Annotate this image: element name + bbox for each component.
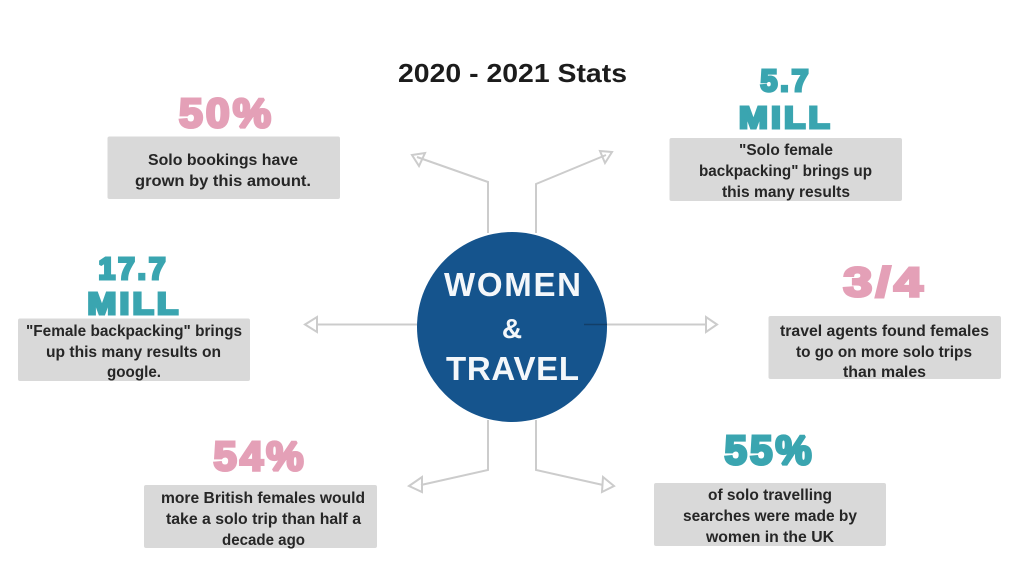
stat: 5.7 mill: 5.7 [760, 63, 812, 98]
central circle [417, 232, 607, 422]
arrow: to travel agents [606, 317, 717, 332]
stat: 50% solo bookings: grown by this amount. [135, 173, 311, 190]
stat: 17.7 mill [18, 251, 250, 381]
stat: 50% solo bookings: 50% [179, 90, 274, 136]
stat: 17.7 mill: google. [107, 364, 161, 381]
arrow: to UK searches [536, 420, 614, 492]
stat: 54% British females: 54% [214, 433, 306, 479]
stat: 55% UK searches: searches were made by [683, 508, 857, 525]
stat: 3/4 travel agents [768, 259, 1001, 381]
stat: 3/4 travel agents: travel agents found females [780, 323, 989, 340]
stat: 3/4 travel agents: than males [843, 364, 926, 381]
stat: 17.7 mill: MILL [88, 286, 182, 321]
stat: 54% British females: take a solo trip than half a [166, 511, 361, 528]
stat: 55% UK searches: of solo travelling [708, 487, 832, 504]
stat: 54% British females: more British females would [161, 490, 365, 507]
arrow: to female backpacking [305, 317, 418, 332]
stat: 50% solo bookings: Solo bookings have [148, 152, 298, 169]
stat: 50% solo bookings [108, 90, 340, 199]
stat: 5.7 mill: MILL [739, 100, 833, 135]
stat: 3/4 travel agents: 3/4 [844, 259, 926, 305]
circle label: WOMEN [444, 266, 581, 303]
circle label: TRAVEL [446, 350, 579, 387]
stat: 55% UK searches: 55% [724, 427, 814, 473]
stat: 3/4 travel agents: to go on more solo trips [796, 344, 972, 361]
title: 2020 - 2021 Stats [398, 58, 627, 88]
arrow: to solo bookings [412, 153, 488, 233]
stat: 5.7 mill: backpacking" brings up [699, 163, 872, 180]
stat: 17.7 mill: up this many results on [46, 344, 221, 361]
stat: 17.7 mill: 17.7 [98, 251, 168, 286]
stat: 5.7 mill: "Solo female [739, 142, 833, 159]
arrow: to solo female backpacking [536, 151, 612, 233]
circle label: & [502, 313, 522, 344]
circle label [444, 266, 581, 387]
stat: 55% UK searches [654, 427, 886, 546]
arrow: to British females [409, 420, 488, 492]
stat: 5.7 mill: this many results [722, 184, 850, 201]
stat: 5.7 mill [670, 63, 902, 201]
stat: 54% British females: decade ago [222, 532, 305, 549]
stat: 55% UK searches: women in the UK [705, 529, 834, 546]
stat: 54% British females [144, 433, 377, 549]
stat: 17.7 mill: "Female backpacking" brings [26, 323, 242, 340]
